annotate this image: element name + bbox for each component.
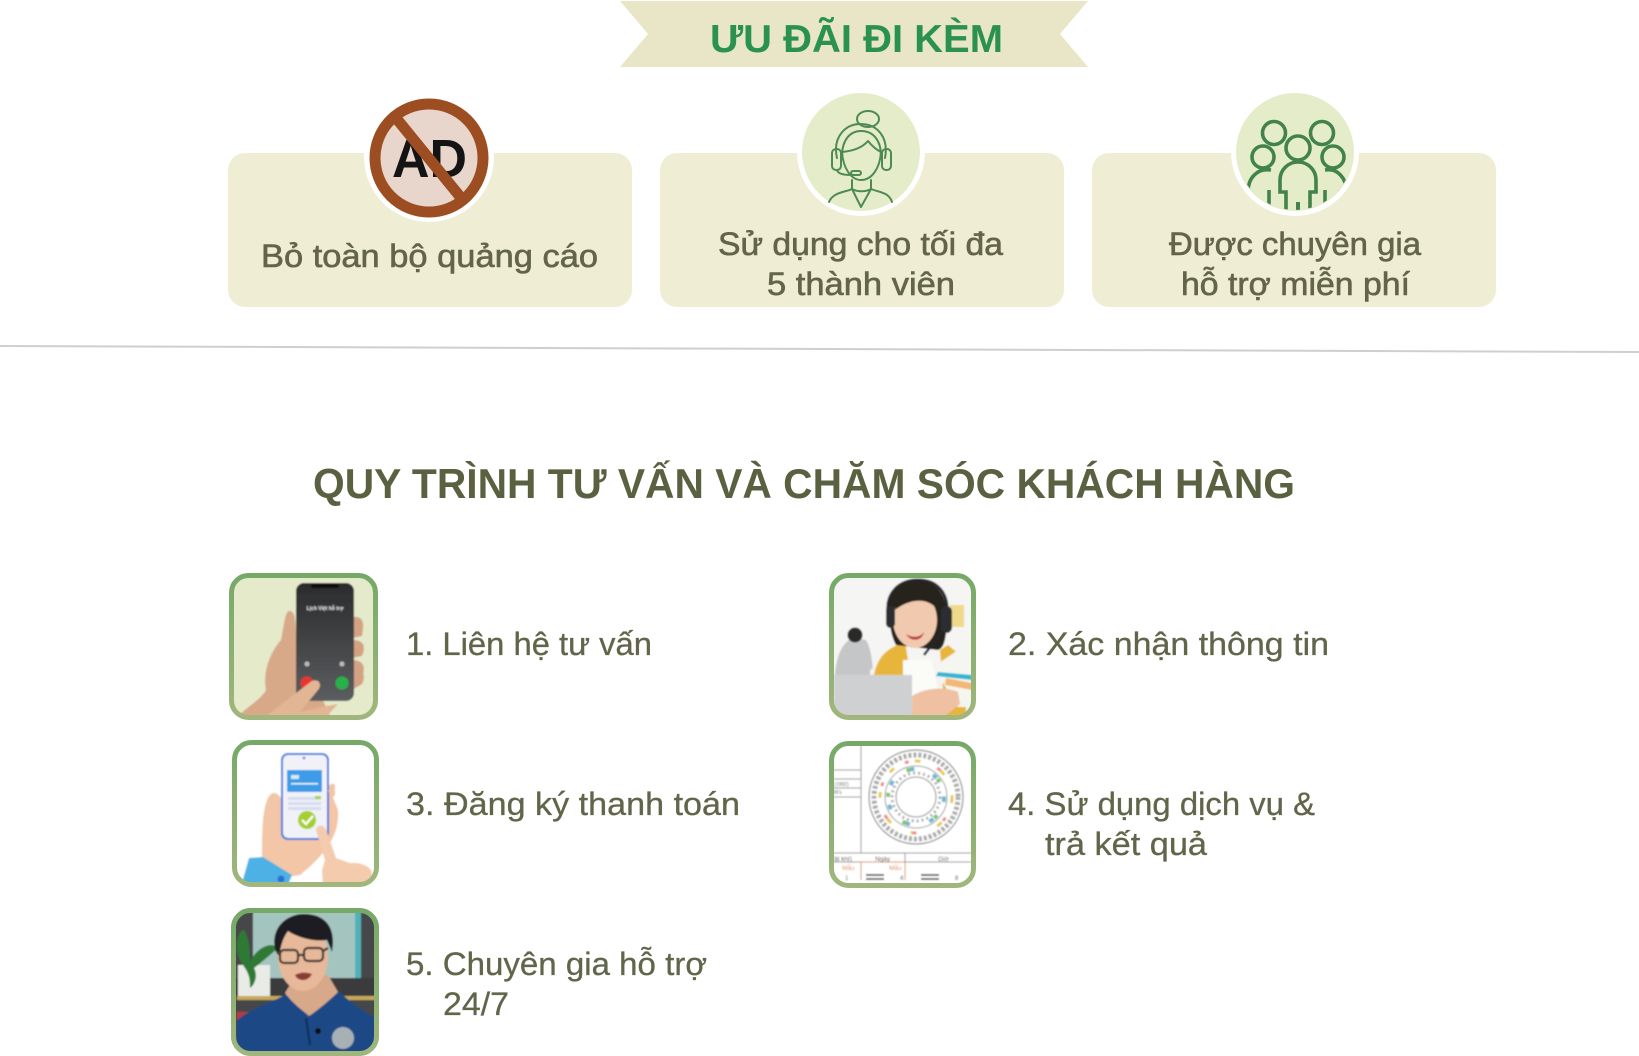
- ribbon heading: ƯU ĐÃI ĐI KÈM: [710, 17, 1003, 61]
- step 1: [229, 573, 652, 720]
- image: horoscope chart: e (1992): [830, 782, 849, 788]
- image: horoscope chart: Ngày: [875, 856, 891, 863]
- label: expert support: hỗ trợ miễn phí: [1181, 266, 1410, 302]
- label: expert support: Được chuyên gia: [1169, 226, 1421, 262]
- image: hand holding phone: Lịch Việt hỗ trợ: [307, 605, 344, 612]
- image: woman with headset: [829, 573, 976, 720]
- label: no ads: Bỏ toàn bộ quảng cáo: [261, 238, 598, 274]
- step 3: [232, 740, 740, 890]
- panel: no ads: [228, 92, 632, 307]
- label: five members: 5 thành viên: [767, 266, 955, 302]
- step text: [1008, 786, 1315, 862]
- image: horoscope chart: [829, 741, 976, 888]
- image: horoscope chart: Mẫu: [889, 863, 902, 872]
- step 5: [231, 908, 707, 1056]
- icon: group of people: [1248, 122, 1347, 210]
- image: hand holding phone: [229, 573, 378, 720]
- image: expert portrait: [231, 908, 379, 1056]
- image: horoscope chart: 1: [845, 876, 849, 882]
- step text: 2. Xác nhận thông tin: [1008, 626, 1329, 662]
- step text: 4. Sử dụng dịch vụ &: [1008, 786, 1315, 822]
- section heading: QUY TRÌNH TƯ VẤN VÀ CHĂM SÓC KHÁCH HÀNG: [313, 459, 1295, 507]
- icon: no ads: AD: [392, 129, 467, 189]
- step 2: [829, 573, 1329, 720]
- label: five members: [718, 226, 1003, 302]
- image: horoscope chart: 4: [900, 876, 904, 882]
- icon: support agent: [829, 111, 892, 207]
- label: expert support: [1169, 226, 1421, 302]
- panel: five members: [660, 88, 1064, 307]
- step 4: [829, 741, 1315, 888]
- step text: [406, 946, 707, 1022]
- step text: 1. Liên hệ tư vấn: [406, 626, 652, 662]
- image: horoscope chart: Tật khí): [830, 856, 852, 863]
- image: horoscope chart: Mẫu: [842, 863, 855, 872]
- step text: 24/7: [443, 986, 509, 1022]
- panel: expert support: [1092, 88, 1496, 307]
- step text: 3. Đăng ký thanh toán: [406, 786, 740, 822]
- label: five members: Sử dụng cho tối đa: [718, 226, 1003, 262]
- image: phone payment: [232, 740, 379, 890]
- ribbon heading: [620, 1, 1088, 67]
- image: horoscope chart: 8: [955, 876, 959, 882]
- image: horoscope chart: Giờ: [938, 856, 950, 863]
- image: horoscope chart: 199's: [830, 790, 842, 796]
- step text: trả kết quả: [1045, 826, 1207, 862]
- icon: no ads: [375, 104, 483, 212]
- step text: 5. Chuyên gia hỗ trợ: [406, 946, 707, 982]
